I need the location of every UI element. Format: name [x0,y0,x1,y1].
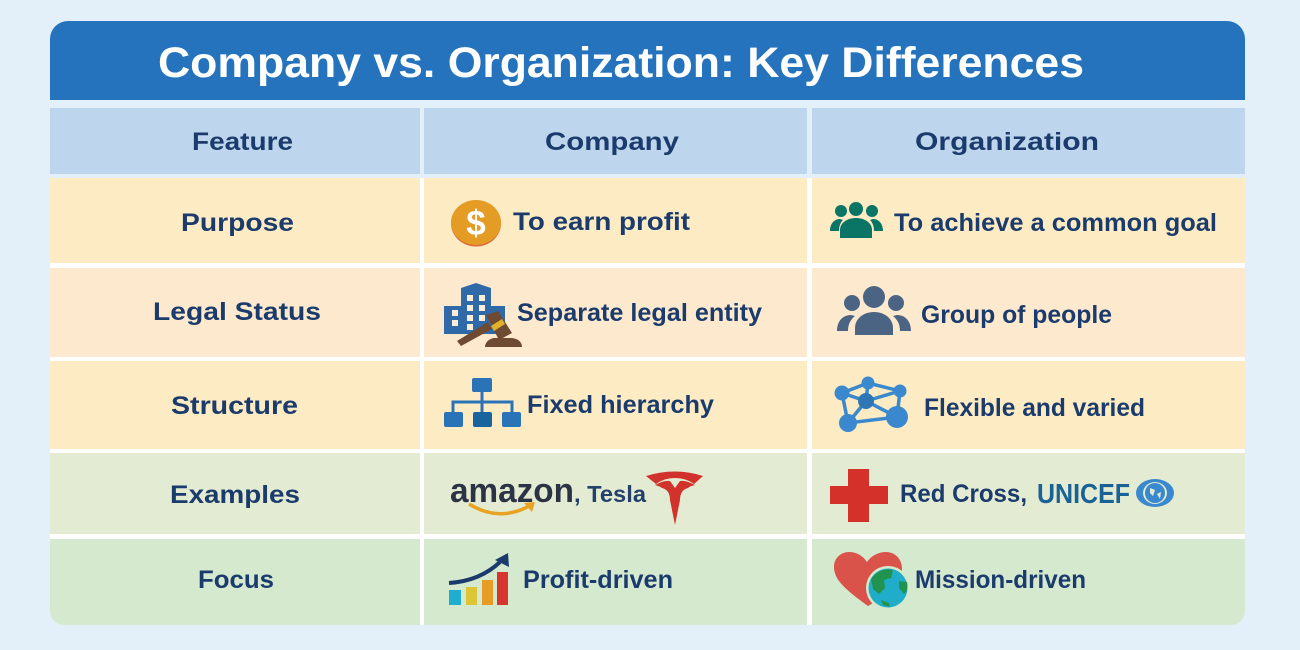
icon: hierarchy [444,378,521,427]
row: Legal Status: Separate legal entity [517,299,762,327]
icon: heart and globe [834,552,910,610]
table header row: Organization [915,128,1099,156]
icon: group of people [837,286,911,335]
row: Structure: Fixed hierarchy [527,391,714,419]
row: Examples [50,453,1245,534]
logo: amazon: amazon [450,472,574,510]
table header row: Feature [192,128,293,156]
logo: UNICEF emblem [1136,479,1174,507]
icon: red cross [830,469,888,522]
row: Structure: Structure [171,392,298,420]
row: Purpose: To achieve a common goal [894,209,1217,237]
row: Focus: Mission-driven [915,566,1086,594]
row: Focus [50,539,1245,625]
icon: team [830,202,883,238]
row: Structure: Flexible and varied [924,394,1145,422]
row: Structure [50,361,1245,449]
row: Purpose: To earn profit [513,208,691,236]
title banner [50,21,1245,100]
logo: Tesla [646,472,703,525]
row: Examples: , Tesla [574,481,646,507]
title banner: Company vs. Organization: Key Differences [158,39,1084,87]
row: Examples: UNICEF [1037,478,1130,509]
icon: network [834,376,908,432]
row: Legal Status [50,268,1245,357]
white table backing [50,178,1245,625]
row: Focus: Profit-driven [523,566,673,594]
table header row: Company [545,128,679,156]
row: Purpose [50,178,1245,263]
icon: growth chart [449,553,509,605]
icon: dollar coin: $ [466,204,486,243]
icon: dollar coin [451,200,501,246]
row: Examples: Red Cross, [900,480,1027,508]
row: Legal Status: Group of people [921,301,1112,329]
row: Purpose: Purpose [181,209,294,237]
table header row [50,108,1245,174]
row: Legal Status: Legal Status [153,298,321,326]
row: Examples: Examples [170,481,300,509]
icon: building and gavel [444,283,522,347]
row: Focus: Focus [198,566,274,594]
